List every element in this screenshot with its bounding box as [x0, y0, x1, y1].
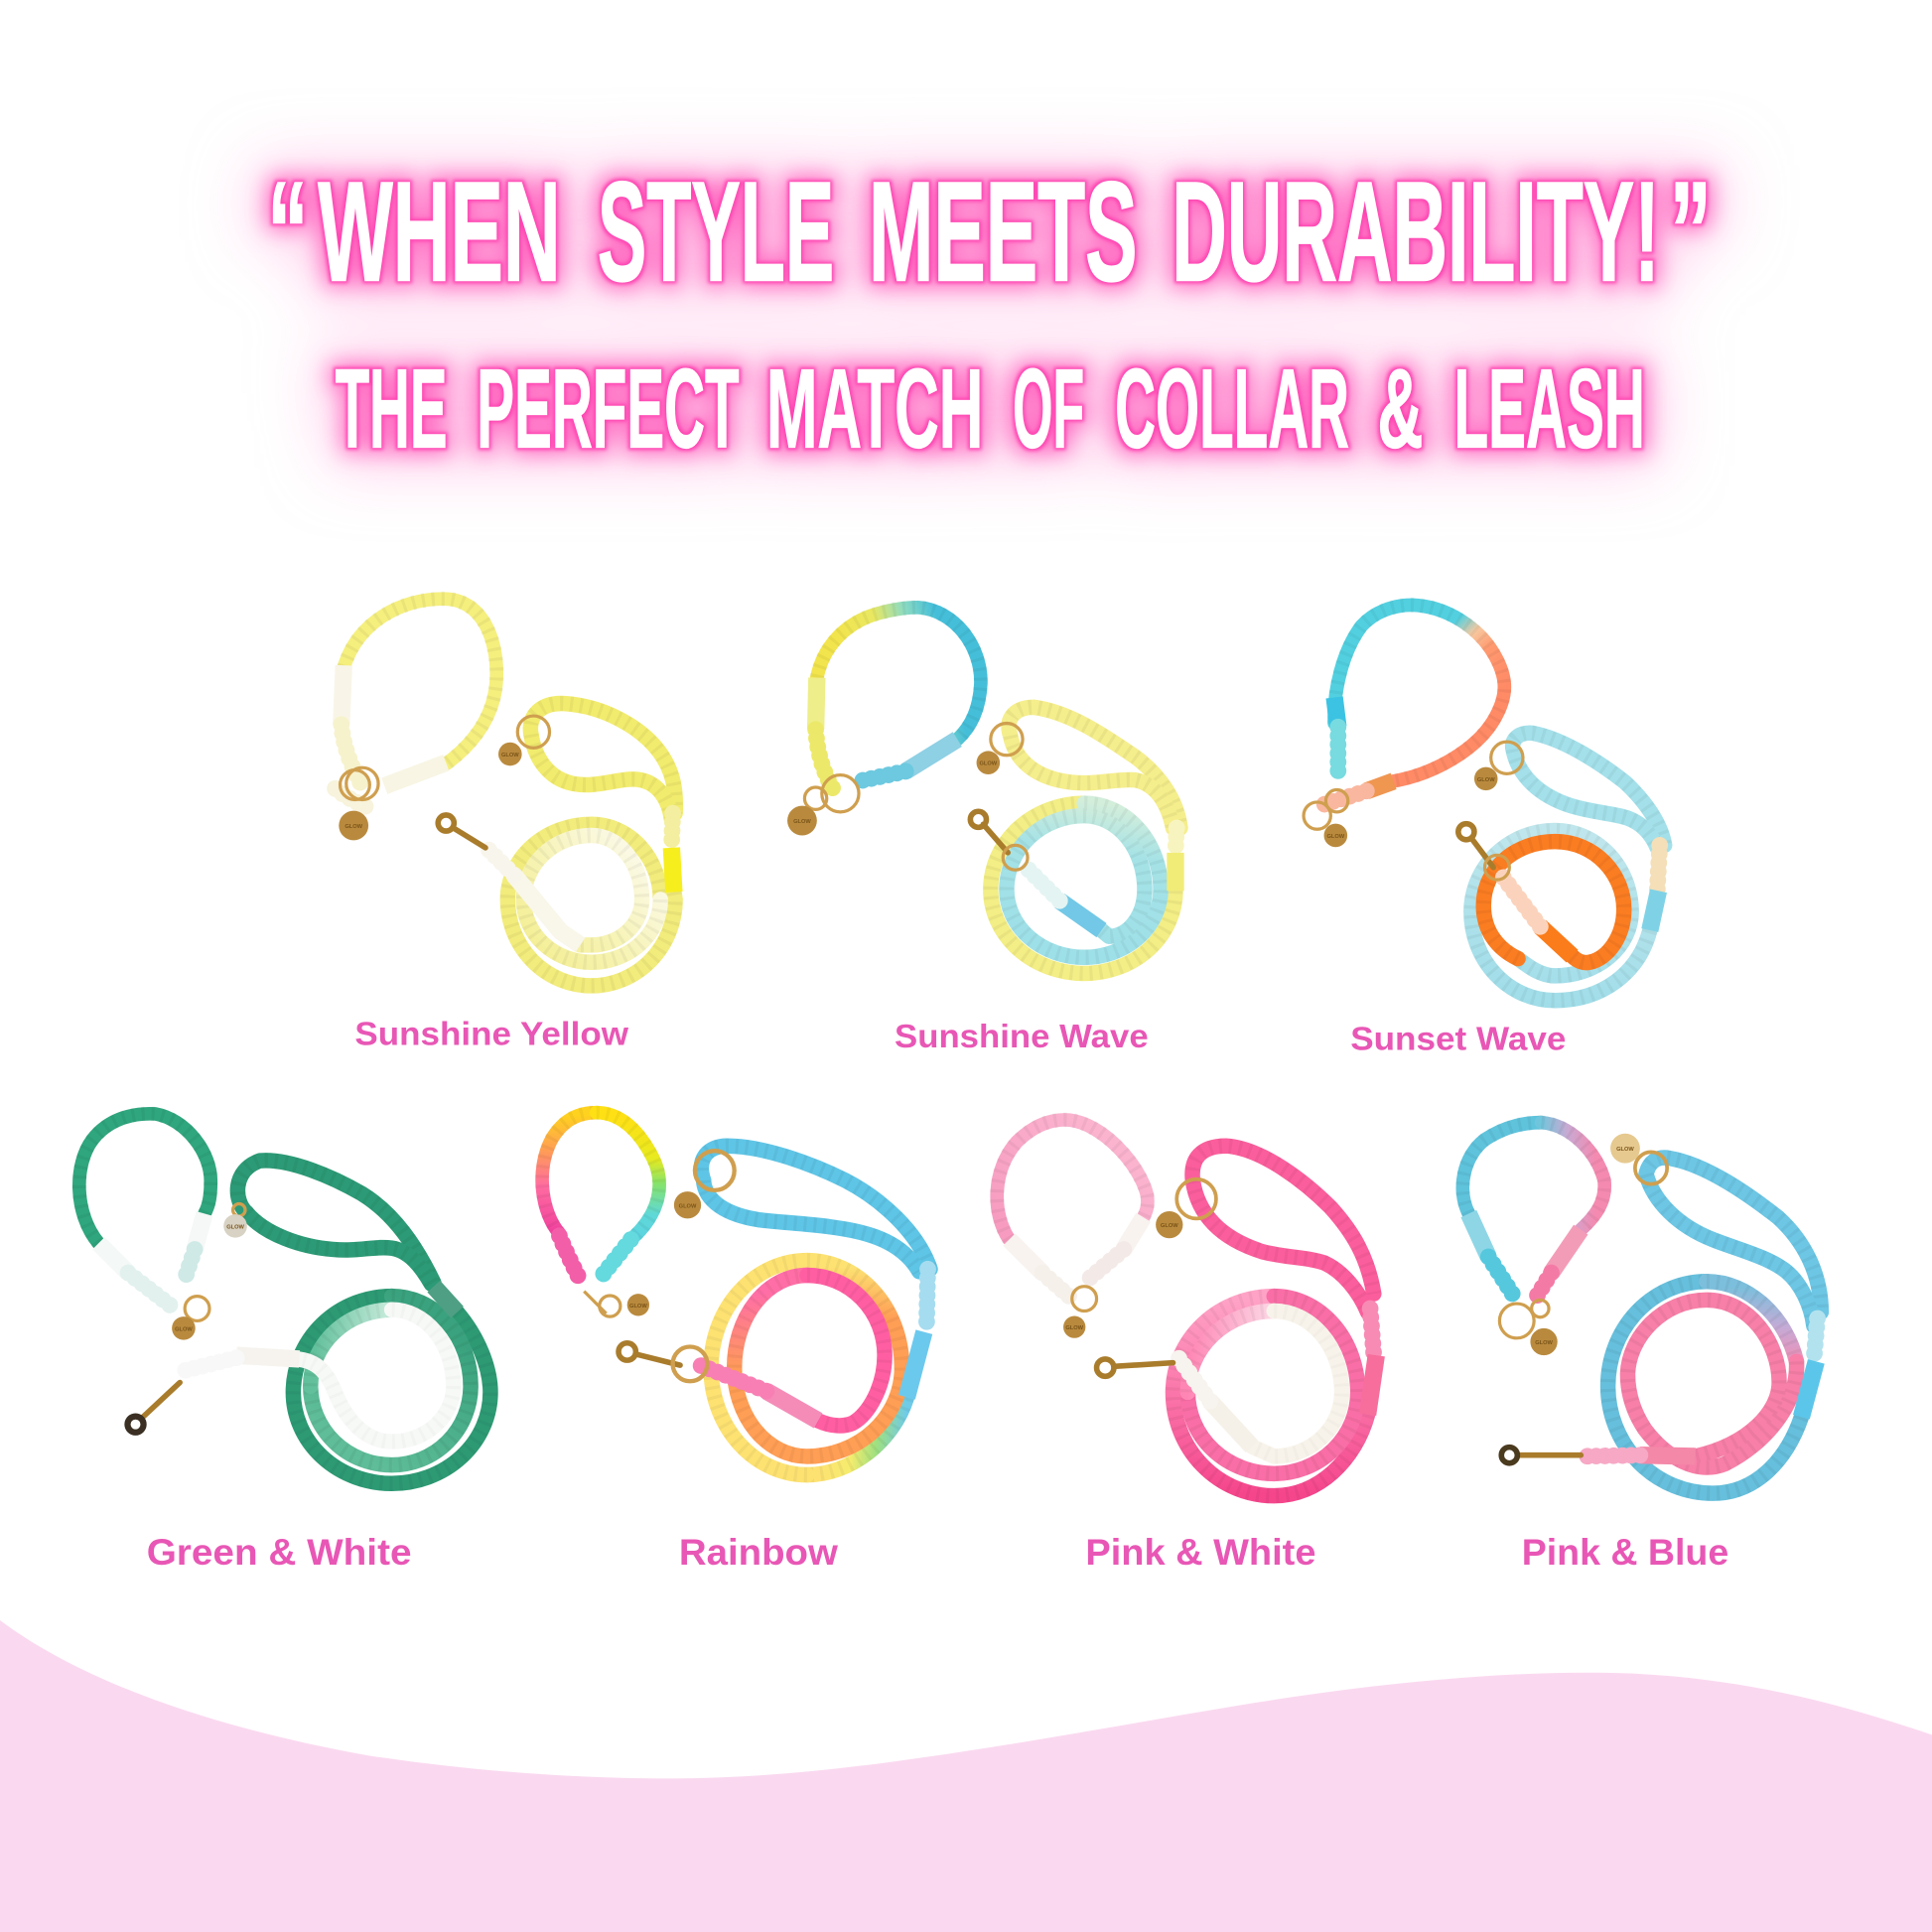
leash	[127, 1161, 490, 1483]
leash	[1458, 733, 1665, 1001]
product set: Rainbow	[542, 1113, 930, 1475]
collar	[997, 1120, 1148, 1338]
label: Sunshine Wave: Sunshine Wave	[895, 1019, 1149, 1055]
collar	[1304, 605, 1504, 847]
leash: GLOW	[679, 1203, 697, 1209]
collar	[79, 1114, 210, 1340]
background wave	[0, 1620, 1932, 1932]
collar: GLOW	[629, 1304, 647, 1310]
collar: GLOW	[175, 1326, 193, 1332]
leash	[970, 707, 1180, 973]
collar	[336, 599, 496, 840]
leash: GLOW	[1161, 1223, 1178, 1229]
product set: Sunset Wave	[1304, 605, 1665, 1001]
product set: Sunshine Yellow	[336, 599, 675, 986]
collar: GLOW	[1326, 834, 1345, 840]
leash: GLOW	[979, 761, 998, 767]
title	[267, 153, 1712, 311]
leash: GLOW	[501, 753, 519, 759]
collar	[1462, 1123, 1604, 1355]
subtitle: LEASH	[1453, 346, 1645, 472]
leash: GLOW	[1477, 777, 1495, 783]
label: Rainbow: Rainbow	[679, 1531, 839, 1573]
collar	[542, 1113, 659, 1316]
leash: GLOW	[1616, 1147, 1634, 1153]
leash	[619, 1146, 930, 1475]
collar: GLOW	[793, 819, 811, 825]
product set: Sunshine Wave	[787, 608, 1180, 973]
product set: Green & White	[79, 1114, 490, 1483]
title: MEETS	[869, 153, 1138, 311]
leash	[1097, 1146, 1376, 1496]
product set: Pink & Blue	[1462, 1123, 1821, 1493]
subtitle: MATCH	[766, 346, 983, 472]
product set: Pink & White	[997, 1120, 1376, 1496]
subtitle: &	[1378, 346, 1423, 472]
title: STYLE	[598, 153, 834, 311]
collar	[787, 608, 981, 835]
title: “	[267, 153, 308, 311]
subtitle: COLLAR	[1115, 346, 1349, 472]
label: Sunset Wave: Sunset Wave	[1350, 1021, 1566, 1057]
subtitle: OF	[1013, 346, 1084, 472]
leash: GLOW	[226, 1224, 245, 1230]
title: WHEN	[318, 153, 561, 311]
label: Green & White: Green & White	[147, 1531, 412, 1573]
subtitle	[336, 346, 1645, 472]
glowing headline	[267, 153, 1712, 472]
leash	[1501, 1134, 1821, 1493]
collar: GLOW	[345, 824, 363, 830]
subtitle: THE	[336, 346, 448, 472]
label: Pink & White: Pink & White	[1085, 1531, 1315, 1573]
label: Pink & Blue: Pink & Blue	[1522, 1531, 1728, 1573]
label: Sunshine Yellow: Sunshine Yellow	[354, 1016, 629, 1052]
subtitle: PERFECT	[477, 346, 740, 472]
title: ”	[1670, 153, 1712, 311]
leash	[438, 704, 675, 986]
collar: GLOW	[1535, 1340, 1554, 1346]
collar: GLOW	[1065, 1325, 1084, 1331]
